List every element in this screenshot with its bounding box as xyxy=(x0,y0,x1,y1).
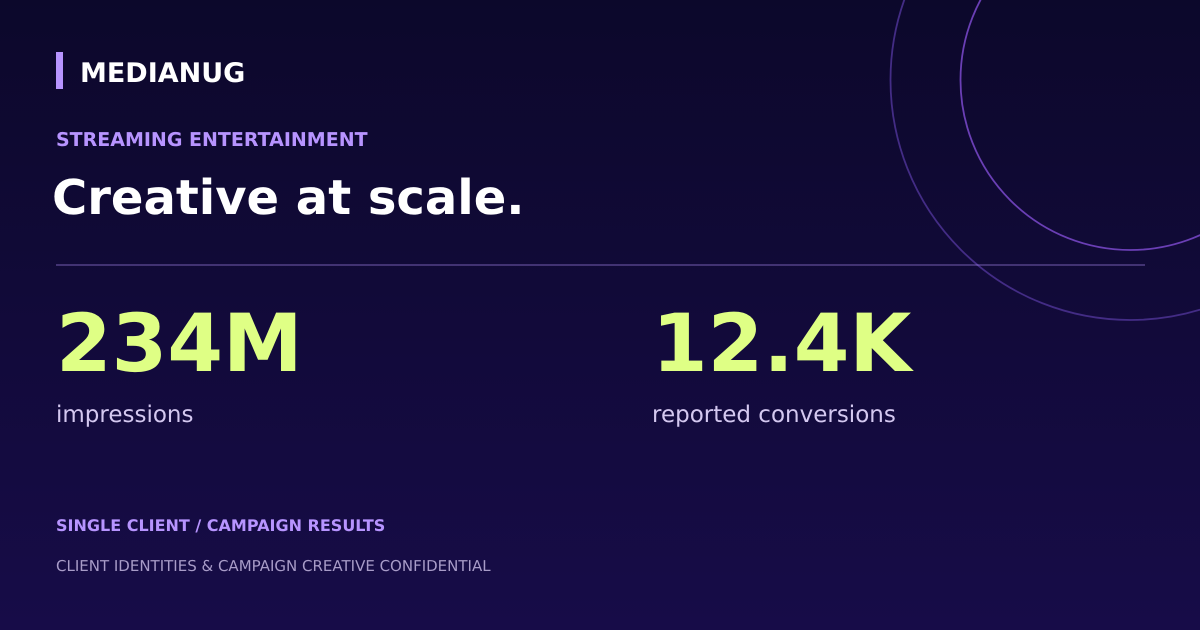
stat: impressions xyxy=(56,297,303,428)
stat value: 12.4K xyxy=(652,297,911,390)
stat label: reported conversions xyxy=(652,402,896,428)
footer label: SINGLE CLIENT / CAMPAIGN RESULTS xyxy=(56,516,385,535)
footer disclaimer: CLIENT IDENTITIES & CAMPAIGN CREATIVE CONFIDENTIAL xyxy=(56,557,491,575)
divider xyxy=(56,264,1145,266)
headline: Creative at scale. xyxy=(52,170,524,226)
brand name: MEDIANUG xyxy=(80,58,245,89)
stat value: 234M xyxy=(56,297,303,390)
stat label: impressions xyxy=(56,402,193,428)
brand accent bar xyxy=(56,52,63,89)
eyebrow category: STREAMING ENTERTAINMENT xyxy=(56,129,368,151)
stat: conversions xyxy=(652,297,914,428)
